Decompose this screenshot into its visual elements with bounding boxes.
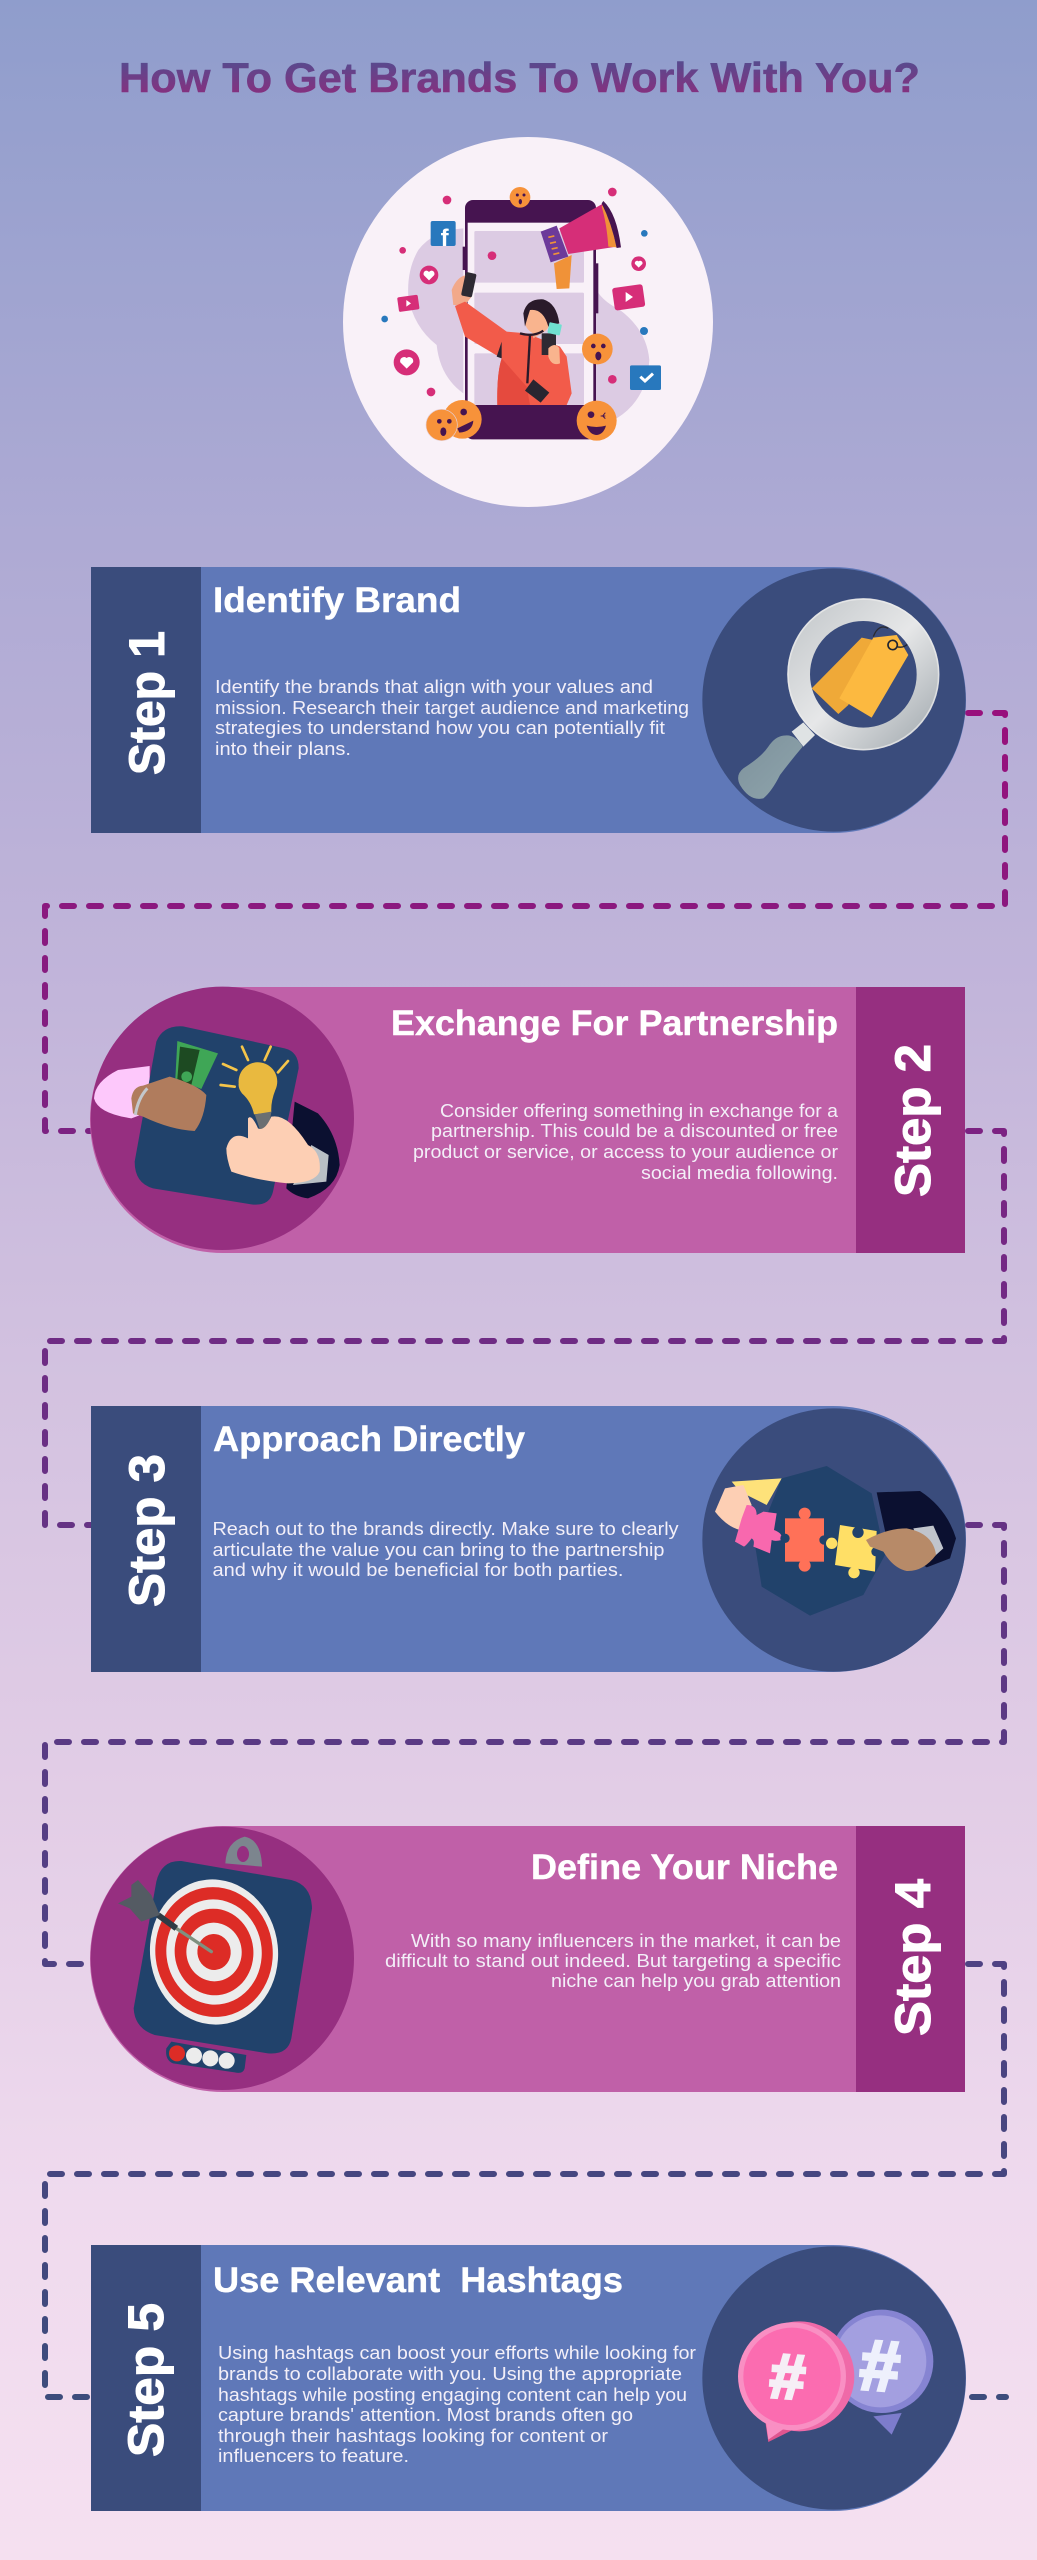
step 5 body text: capture brands' attention. Most brands often go	[218, 2405, 633, 2425]
step 2 body text: Consider offering something in exchange for a	[440, 1101, 839, 1121]
step 1 body text: strategies to understand how you can potentially fit	[215, 718, 665, 738]
step 3 tab: Step 3	[119, 1454, 175, 1607]
step 2 tab: Step 2	[885, 1044, 941, 1197]
step 4 heading: Define Your Niche	[531, 1848, 838, 1887]
step 5 body text: hashtags while posting engaging content can help you	[218, 2385, 687, 2405]
step 1 body text: mission. Research their target audience and marketing	[215, 698, 689, 718]
icon: hands joining puzzle pieces	[702, 1408, 966, 1672]
step 2 body text: social media following.	[641, 1163, 838, 1183]
dashed connector: step 3 to step 4	[45, 1525, 1004, 1964]
step 3 tab	[91, 1406, 201, 1672]
step 5 tab: Step 5	[118, 2303, 174, 2457]
step 2 tab	[856, 987, 965, 1253]
hero illustration: influencer in a phone	[343, 137, 713, 507]
step 3 body text: Reach out to the brands directly. Make sure to clearly	[212, 1519, 678, 1539]
step 2 body text: product or service, or access to your audience or	[413, 1142, 838, 1162]
step 3 body text	[212, 1519, 678, 1580]
panel: step 5 use relevant hashtags	[91, 2245, 966, 2511]
step 5 body text: Using hashtags can boost your efforts while looking for	[218, 2343, 696, 2363]
step 5 body text: through their hashtags looking for content or	[218, 2426, 608, 2446]
step 2 body text	[413, 1101, 839, 1183]
step 1 body text: into their plans.	[215, 739, 351, 759]
icon: magnifying glass over price tags	[702, 568, 966, 832]
step 3 body text: and why it would be beneficial for both parties.	[212, 1560, 624, 1580]
step 5 tab	[91, 2245, 201, 2511]
step 5 body text: influencers to feature.	[218, 2446, 409, 2466]
dashed connector: step 5 tail	[972, 2394, 1006, 2400]
step 4 body text	[385, 1931, 841, 1991]
step 4 body text: niche can help you grab attention	[551, 1971, 841, 1991]
step 3 heading: Approach Directly	[213, 1420, 526, 1459]
dashed connector: step 4 to step 5	[45, 1964, 1004, 2397]
step 1 heading: Identify Brand	[213, 581, 461, 620]
step 1 tab: Step 1	[119, 631, 175, 775]
title: How To Get Brands To Work With You?	[119, 54, 920, 101]
step 2 heading: Exchange For Partnership	[391, 1004, 838, 1043]
dashed connector: step 1 to step 2	[45, 713, 1005, 1131]
icon: hands exchanging money and idea	[91, 987, 354, 1250]
icon: dartboard with dart	[91, 1827, 354, 2090]
panel: step 2 exchange for partnership	[90, 987, 965, 1253]
step 5 body text	[218, 2343, 696, 2466]
icon: hashtag speech bubbles: #	[767, 2341, 807, 2413]
panel: step 4 define your niche	[90, 1826, 965, 2092]
hero illustration: influencer in a phone: f	[441, 225, 450, 252]
step 1 body text	[215, 677, 689, 759]
step 4 tab: Step 4	[885, 1879, 941, 2036]
step 5 body text: brands to collaborate with you. Using the appropriate	[218, 2364, 682, 2384]
step 5 heading: Use Relevant Hashtags	[213, 2261, 623, 2300]
icon: hashtag speech bubbles	[702, 2246, 966, 2510]
step 4 body text: With so many influencers in the market, it can be	[411, 1931, 841, 1951]
panel: step 1 identify brand	[91, 567, 966, 833]
step 4 tab	[856, 1826, 965, 2092]
step 2 body text: partnership. This could be a discounted or free	[431, 1121, 838, 1141]
step 4 body text: difficult to stand out indeed. But targeting a specific	[385, 1951, 841, 1971]
step 1 body text: Identify the brands that align with your values and	[215, 677, 653, 697]
dashed connector: step 2 to step 3	[45, 1131, 1004, 1525]
panel: step 3 approach directly	[91, 1406, 966, 1672]
step 1 tab	[91, 567, 201, 833]
icon: hashtag speech bubbles: #	[857, 2325, 903, 2408]
step 3 body text: articulate the value you can bring to the partnership	[212, 1540, 664, 1560]
